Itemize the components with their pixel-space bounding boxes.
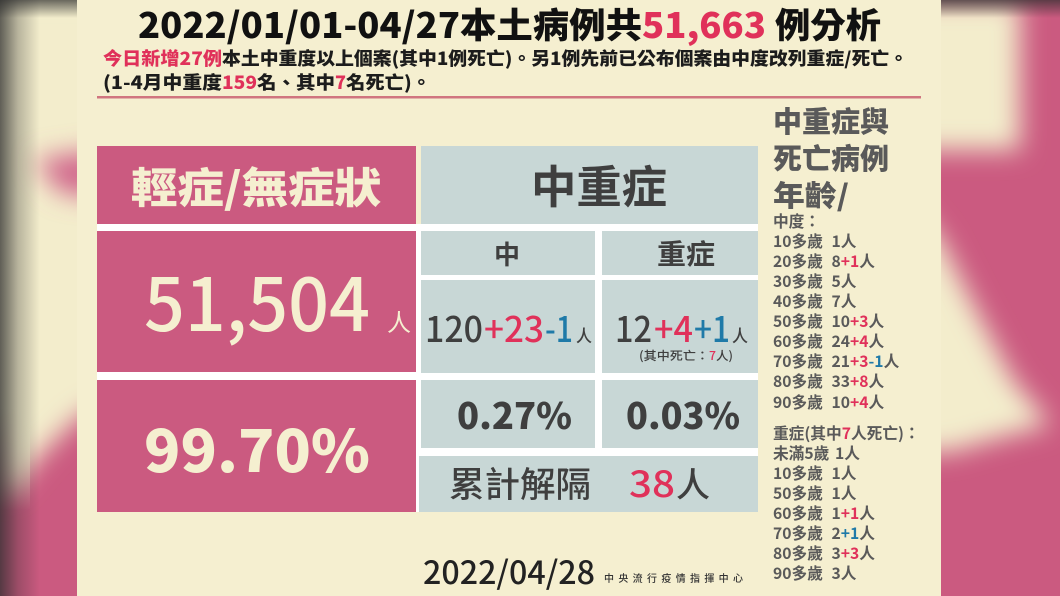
list: moderate by age: 40多歲 7人 [773,289,857,312]
mild percentage: 99.70% [144,405,370,489]
white table backing [97,224,758,512]
subtitle text: (1-4月中重度 [103,69,222,95]
moderate percentage: 0.27% [457,388,572,440]
panel: moderate and severe [419,146,758,512]
severe count [615,302,748,353]
subtitle text: 今日新增27例 [103,45,222,71]
list: moderate by age: 20多歲 8+1人 [773,249,875,272]
mild unit: 人 [387,303,411,338]
list: severe by age: 90多歲 3人 [773,561,857,584]
moderate count: +23 [484,302,544,353]
moderate count: -1 [545,302,573,353]
moderate count: 120 [425,302,483,353]
heading: moderate-severe: 中重症 [531,151,667,216]
moderate count: 人 [576,322,592,347]
severe percentage: 0.03% [626,388,740,440]
list: moderate by age: 80多歲 33+8人 [773,369,884,392]
list: severe by age: 80多歲 3+3人 [773,541,875,564]
title [138,0,881,49]
subtitle text [103,45,908,95]
list: severe by age: 70多歲 2+1人 [773,521,875,544]
source: CECC: 中央流行疫情指揮中心 [604,570,743,585]
column label: moderate: 中 [494,235,520,272]
list: moderate by age: 30多歲 5人 [773,269,857,292]
subtitle text: 159 [222,69,257,95]
severe death note: 7 [709,347,716,364]
list: moderate by age: 中度： [773,209,820,232]
heading: age breakdown: 中重症與 [773,99,889,141]
released count: 38 [629,456,675,508]
severe death note: (其中死亡： [639,347,709,364]
heading: age breakdown [773,99,889,215]
mild case count: 51,504 [144,247,370,353]
header rule [97,96,921,98]
list: moderate by age: 60多歲 24+4人 [773,329,884,352]
heading: age breakdown: 年齡/ [773,173,849,215]
panel: mild and asymptomatic [97,146,416,512]
list: severe by age: 10多歲 1人 [773,461,857,484]
severe count: 12 [615,302,652,353]
list: severe by age: 50多歲 1人 [773,481,857,504]
released count: 人 [676,458,710,507]
list: severe by age: 重症(其中7人死亡)： [773,421,920,444]
severe count: +1 [694,302,730,353]
released label: 累計解隔 [449,457,591,508]
moderate count [425,302,592,353]
column label: severe: 重症 [657,233,715,273]
list: moderate by age [773,209,900,413]
list: severe by age: 60多歲 1+1人 [773,501,875,524]
heading: age breakdown: 死亡病例 [773,136,889,178]
subtitle text: 7 [335,69,346,95]
list: severe by age [773,421,920,584]
subtitle text: 本土中重度以上個案(其中1例死亡)。另1例先前已公布個案由中度改列重症/死亡。 [222,45,908,71]
list: moderate by age: 70多歲 21+3-1人 [773,349,900,372]
heading: mild: 輕症/無症狀 [131,155,381,216]
list: moderate by age: 10多歲 1人 [773,229,857,252]
severe count: +4 [654,302,693,353]
list: moderate by age: 50多歲 10+3人 [773,309,884,332]
subtitle text: 名、其中 [257,69,335,95]
severe count: 人 [732,322,748,347]
severe death note [639,347,733,364]
released count [629,456,710,508]
severe death note: 人) [716,347,733,364]
list: moderate by age: 90多歲 10+4人 [773,390,884,413]
date: 2022/04/28 [423,548,595,594]
subtitle text: 名死亡)。 [346,69,431,95]
list: severe by age: 未滿5歲 1人 [773,441,860,464]
